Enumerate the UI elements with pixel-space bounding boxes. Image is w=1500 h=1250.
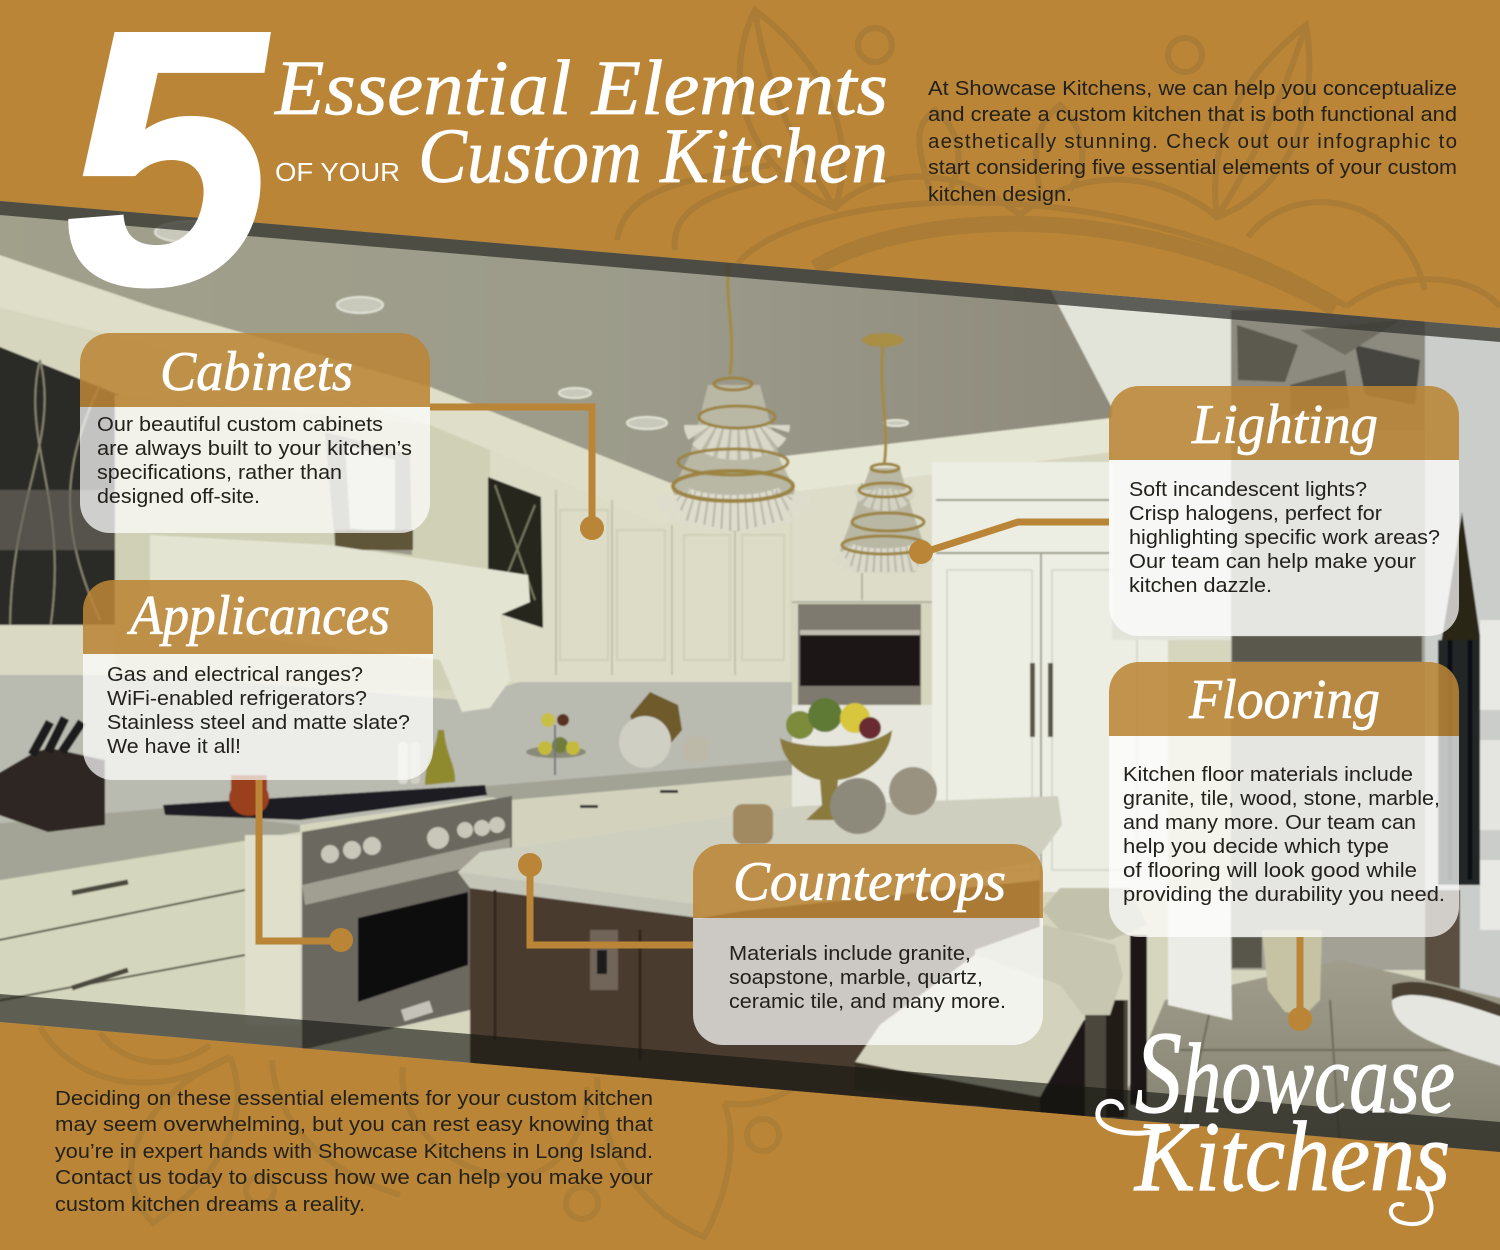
recessed ceiling lights <box>155 221 908 429</box>
panel: countertops: Countertops <box>733 851 1006 913</box>
chandelier large <box>672 262 795 532</box>
closing text: may seem overwhelming, but you can rest easy knowing that <box>55 1113 653 1136</box>
panel: countertops <box>693 844 1043 1045</box>
panel: countertops: ceramic tile, and many more. <box>729 990 1006 1013</box>
intro text: At Showcase Kitchens, we can help you conceptualize <box>928 77 1457 100</box>
panel: applicances: We have it all! <box>107 735 241 758</box>
right wall cabinets <box>786 418 1112 602</box>
panel: flooring: and many more. Our team can <box>1123 811 1416 834</box>
panel: flooring: granite, tile, wood, stone, marble, <box>1123 787 1440 810</box>
panel: applicances: Applicances <box>126 585 390 647</box>
panel: flooring: Flooring <box>1188 669 1380 731</box>
stairs and right wall <box>1425 300 1500 1000</box>
intro text: aesthetically stunning. Check out our infographic to <box>928 130 1457 153</box>
intro text <box>928 77 1457 206</box>
dark band under top panel <box>0 201 1500 342</box>
kitchen island <box>458 796 1062 1110</box>
logo: Showcase Kitchens <box>1098 1007 1455 1224</box>
closing text <box>55 1087 653 1216</box>
connector: flooring <box>1288 937 1312 1031</box>
panel: lighting: Our team can help make your <box>1129 550 1416 573</box>
connector: countertops <box>518 853 693 945</box>
bar stools <box>855 888 1147 1130</box>
panel: cabinets: are always built to your kitchen’s <box>97 437 412 460</box>
connector: lighting <box>909 522 1109 564</box>
intro text: start considering five essential elements of your custom <box>928 156 1457 179</box>
crown molding <box>0 256 787 524</box>
fruit bowl <box>733 698 937 844</box>
closing text: you’re in expert hands with Showcase Kitchens in Long Island. <box>55 1140 653 1163</box>
curved stair base <box>1391 994 1500 1067</box>
floor vase <box>1262 930 1322 1015</box>
kitchen photo <box>0 180 1500 1180</box>
chandelier small <box>840 333 926 572</box>
panel: cabinets <box>80 333 430 533</box>
left counter and cabinets <box>0 718 300 1030</box>
closing text: Deciding on these essential elements for your custom kitchen <box>55 1087 653 1110</box>
panel: cabinets: specifications, rather than <box>97 461 342 484</box>
intro text: kitchen design. <box>928 183 1072 206</box>
stove range <box>163 775 512 1050</box>
panel: cabinets: Our beautiful custom cabinets <box>97 413 383 436</box>
closing text: Contact us today to discuss how we can help you make your <box>55 1166 653 1189</box>
closing text: custom kitchen dreams a reality. <box>55 1193 365 1216</box>
upper cabinets <box>115 395 790 690</box>
left glass cabinet <box>0 346 118 626</box>
watermark: bottom mandala <box>40 1027 800 1237</box>
panel: countertops: soapstone, marble, quartz, <box>729 966 983 989</box>
panel: lighting: kitchen dazzle. <box>1129 574 1272 597</box>
backsplash <box>0 675 792 825</box>
white pillar <box>1168 890 1232 1020</box>
connector: applicances <box>259 780 353 952</box>
refrigerator panels <box>792 462 1168 892</box>
panel: applicances <box>83 580 433 780</box>
panel: cabinets: Cabinets <box>160 341 353 403</box>
panel: lighting: highlighting specific work areas? <box>1129 526 1440 549</box>
panel: flooring <box>1109 662 1459 937</box>
picture frame on hood <box>325 432 413 555</box>
panel: flooring: help you decide which type <box>1123 835 1389 858</box>
panel: flooring: Kitchen floor materials include <box>1123 763 1413 786</box>
panel: flooring: providing the durability you need. <box>1123 883 1445 906</box>
bottles beside stove <box>398 730 455 785</box>
dark band above bottom panel <box>0 994 1500 1152</box>
panel: countertops: Materials include granite, <box>729 942 971 965</box>
title: Custom Kitchen <box>418 112 888 199</box>
floor <box>1116 961 1500 1152</box>
intro text: and create a custom kitchen that is both functional and <box>928 103 1457 126</box>
panel: lighting <box>1109 386 1459 636</box>
panel: applicances: Gas and electrical ranges? <box>107 663 363 686</box>
panel: applicances: Stainless steel and matte slate? <box>107 711 410 734</box>
range hood <box>150 535 530 712</box>
title: Essential Elements <box>274 44 888 131</box>
logo: Showcase Kitchens: Kitchens <box>1133 1101 1450 1212</box>
title <box>274 44 888 199</box>
connector: cabinets <box>430 407 604 540</box>
wall oven <box>798 604 921 705</box>
panel: lighting: Crisp halogens, perfect for <box>1129 502 1382 525</box>
white soffit <box>1048 285 1240 640</box>
lower cabinets back run <box>483 760 792 809</box>
panel: applicances: WiFi-enabled refrigerators? <box>107 687 367 710</box>
panel: cabinets: designed off-site. <box>97 485 260 508</box>
counter decor: vases and fruit stand <box>526 692 683 776</box>
stone wall <box>1231 310 1425 970</box>
panel: lighting: Soft incandescent lights? <box>1129 478 1367 501</box>
ceiling <box>0 190 1112 483</box>
panel: flooring: of flooring will look good while <box>1123 859 1417 882</box>
watermark: top mandala <box>617 10 1500 308</box>
panel: lighting: Lighting <box>1191 394 1378 456</box>
title: OF YOUR <box>275 157 400 187</box>
